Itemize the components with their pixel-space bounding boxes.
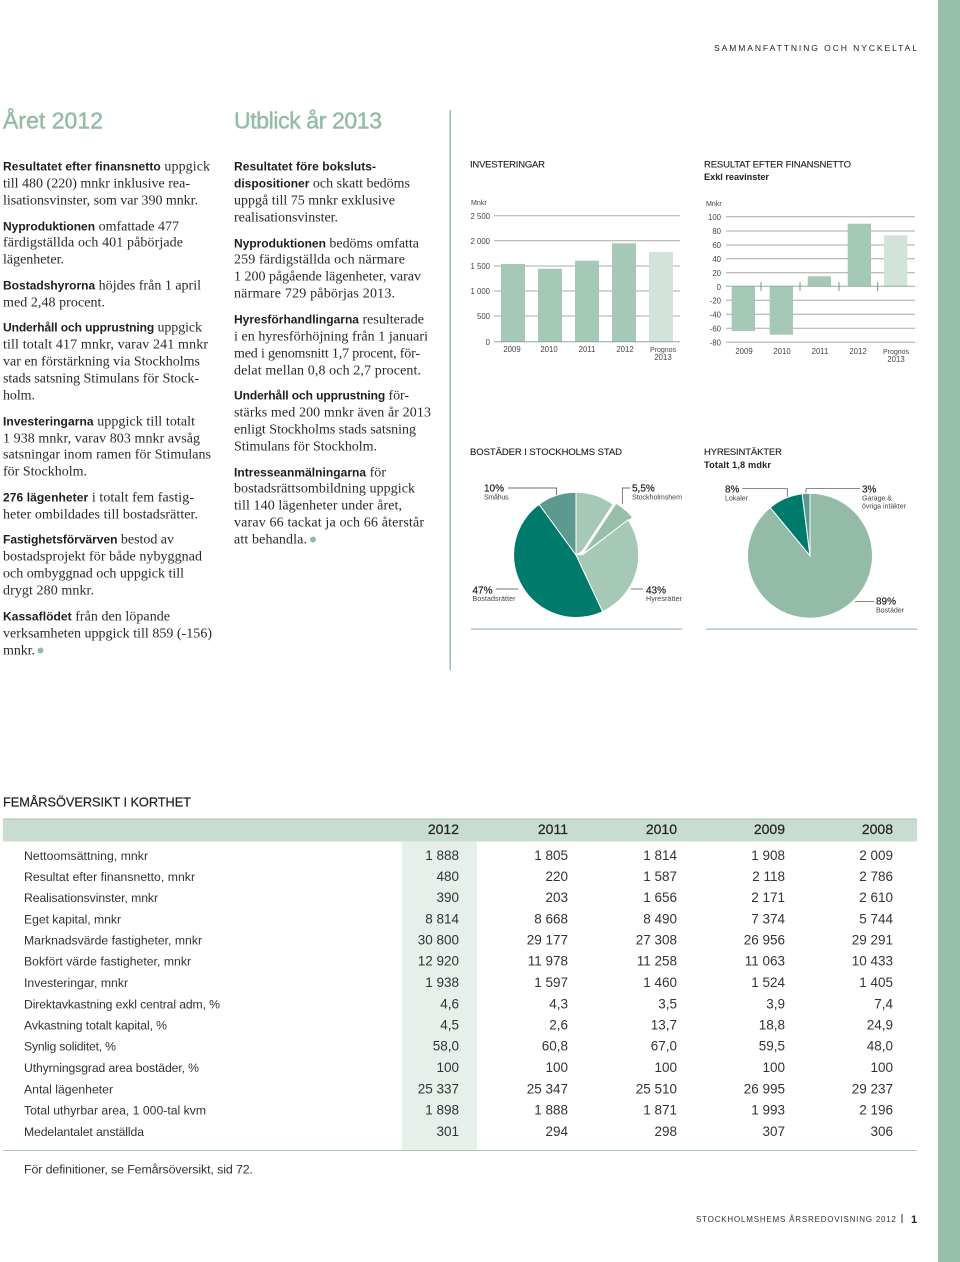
bar chart: Resultat efter finansnetto: -20 bbox=[710, 296, 722, 306]
column 2011: 2,6 bbox=[549, 1018, 568, 1032]
column 2010: 67,0 bbox=[651, 1038, 677, 1054]
pie chart: Bostäder i Stockholms stad: 5,5% bbox=[632, 484, 655, 494]
text block: Utblick år 2013: Stimulans för Stockholm. bbox=[234, 440, 377, 454]
text block: Utblick år 2013: dispositioner och skatt bedöms bbox=[234, 176, 410, 192]
text block: Utblick år 2013: stärks med 200 mnkr även år 2013 bbox=[234, 406, 431, 420]
text block: Året 2012: till totalt 417 mnkr, varav 241 mnkr bbox=[3, 338, 208, 352]
pie chart: Bostäder i Stockholms stad: Stockholmshem bbox=[632, 494, 682, 502]
column 2012: 1 898 bbox=[425, 1102, 459, 1118]
bar chart: Investeringar: Mnkr bbox=[471, 199, 487, 207]
bar chart: Investeringar bbox=[470, 160, 680, 362]
text block: Året 2012: mnkr. bbox=[3, 644, 35, 658]
column 2012: 58,0 bbox=[433, 1038, 459, 1054]
pie chart: Bostäder i Stockholms stad: Hyresrätter bbox=[646, 595, 683, 603]
column 2010: 1 460 bbox=[643, 975, 677, 990]
bar chart: Resultat efter finansnetto: Prognos bbox=[883, 349, 910, 356]
column 2011: 8 668 bbox=[534, 912, 568, 926]
table header years bbox=[428, 821, 893, 837]
text block: Utblick år 2013: Intresseanmälningarna för bbox=[234, 466, 386, 480]
bar chart: Resultat efter finansnetto: 80 bbox=[712, 227, 722, 236]
column 2009: 1 524 bbox=[751, 975, 785, 990]
column 2010: 1 871 bbox=[643, 1102, 677, 1118]
row labels: Resultat efter finansnetto, mnkr bbox=[24, 870, 195, 884]
bar chart: Resultat efter finansnetto: 40 bbox=[712, 255, 722, 264]
column 2012: 25 337 bbox=[418, 1082, 459, 1096]
column 2008: 29 291 bbox=[852, 932, 893, 948]
table header years: 2010 bbox=[646, 821, 677, 837]
column 2008: 2 196 bbox=[859, 1102, 893, 1118]
pie chart: Hyresintäkter bbox=[704, 447, 917, 630]
pie chart: Bostäder i Stockholms stad: BOSTÄDER I STOCKHOLMS STAD bbox=[470, 447, 622, 458]
column 2010: 11 258 bbox=[637, 954, 677, 968]
text block: Utblick år 2013: Underhåll och upprustning för- bbox=[234, 388, 409, 404]
column 2012: 100 bbox=[436, 1060, 459, 1075]
bar chart: Investeringar: 0 bbox=[486, 338, 491, 347]
bar chart: Investeringar: 2011 bbox=[579, 345, 595, 354]
column 2008: 10 433 bbox=[852, 954, 893, 968]
column 2009: 26 995 bbox=[744, 1082, 785, 1096]
bar chart: Investeringar: 2013 bbox=[654, 353, 672, 362]
text block: Året 2012: och ombyggnad och uppgick till bbox=[3, 566, 184, 582]
text block: Utblick år 2013: att behandla. bbox=[234, 532, 307, 548]
table header years: 2012 bbox=[428, 821, 459, 837]
vertical divider bbox=[450, 110, 451, 670]
row labels: Antal lägenheter bbox=[24, 1082, 113, 1096]
text block: Året 2012: Underhåll och upprustning uppgick bbox=[3, 320, 202, 336]
pie chart: Hyresintäkter: 8% bbox=[725, 484, 740, 496]
text block: Utblick år 2013 bbox=[234, 160, 431, 548]
text block: Året 2012: 1 938 mnkr, varav 803 mnkr avsåg bbox=[3, 432, 200, 446]
column 2008 bbox=[852, 848, 893, 1139]
pie chart: Hyresintäkter: HYRESINTÄKTER bbox=[704, 447, 782, 458]
bar chart: Investeringar: 1 000 bbox=[470, 287, 491, 296]
pie chart: Bostäder i Stockholms stad bbox=[470, 447, 683, 630]
pie chart: Bostäder i Stockholms stad: 10% bbox=[484, 484, 504, 494]
column 2011: 220 bbox=[545, 869, 568, 884]
bar chart: Resultat efter finansnetto: RESULTAT EFTER FINANSNETTO bbox=[704, 160, 851, 170]
column 2009: 3,9 bbox=[766, 996, 785, 1012]
column 2011: 1 805 bbox=[534, 848, 568, 863]
bar chart: Investeringar: 500 bbox=[477, 312, 491, 321]
column 2012: 4,5 bbox=[440, 1018, 459, 1032]
row labels: Nettoomsättning, mnkr bbox=[24, 849, 148, 863]
column 2011: 1 597 bbox=[534, 975, 568, 990]
column 2012: 390 bbox=[436, 890, 459, 905]
column 2011: 203 bbox=[545, 890, 568, 905]
text block: Utblick år 2013: närmare 729 påbörjas 2013. bbox=[234, 286, 395, 302]
row labels: Uthyrningsgrad area bostäder, % bbox=[24, 1061, 199, 1075]
column 2012: 1 888 bbox=[425, 848, 459, 863]
table: five-year overview bbox=[3, 818, 917, 1151]
column 2010: 3,5 bbox=[658, 996, 677, 1012]
text block: Utblick år 2013: 1 200 pågående lägenheter, varav bbox=[234, 270, 421, 284]
row labels: Total uthyrbar area, 1 000-tal kvm bbox=[24, 1104, 206, 1118]
text block: Året 2012: lägenheter. bbox=[3, 252, 64, 268]
text block: Utblick år 2013: enligt Stockholms stads satsning bbox=[234, 422, 416, 438]
column 2009: 11 063 bbox=[745, 954, 785, 968]
column 2008: 2 786 bbox=[859, 869, 893, 884]
text block: Året 2012: färdigställda och 401 påbörjade bbox=[3, 236, 183, 250]
bar chart: Resultat efter finansnetto: -80 bbox=[710, 338, 722, 348]
column 2010: 298 bbox=[654, 1124, 677, 1139]
column 2012: 301 bbox=[436, 1124, 459, 1139]
column 2010: 1 656 bbox=[643, 890, 677, 905]
pie chart: Hyresintäkter: Bostäder bbox=[876, 606, 905, 614]
page footer: STOCKHOLMSHEMS ÅRSREDOVISNING 2012 bbox=[696, 1215, 897, 1224]
pie chart: Bostäder i Stockholms stad: Småhus bbox=[484, 494, 509, 502]
pie chart: Hyresintäkter: Garage & bbox=[862, 494, 892, 502]
text block: Året 2012: Kassaflödet från den löpande bbox=[3, 610, 170, 624]
bar chart: Investeringar: Prognos bbox=[650, 347, 677, 354]
bar chart: Resultat efter finansnetto: 2010 bbox=[773, 347, 791, 356]
page footer bbox=[696, 1214, 917, 1226]
text block: Året 2012: Investeringarna uppgick till totalt bbox=[3, 414, 195, 430]
pie chart: Bostäder i Stockholms stad: Bostadsrätter bbox=[472, 595, 516, 603]
column 2009: 1 908 bbox=[751, 848, 785, 863]
text block: Utblick år 2013: med i genomsnitt 1,7 procent, för- bbox=[234, 346, 420, 362]
text block: Året 2012: för Stockholm. bbox=[3, 464, 87, 480]
text block: Året 2012: bostadsprojekt för både nybyggnad bbox=[3, 550, 202, 564]
column 2010: 8 490 bbox=[643, 912, 677, 926]
text block: Året 2012: var en förstärkning via Stockholms bbox=[3, 354, 200, 370]
bar chart: Resultat efter finansnetto: 100 bbox=[708, 213, 722, 222]
column 2008: 306 bbox=[870, 1124, 893, 1139]
column 2010: 13,7 bbox=[651, 1018, 677, 1032]
pie chart: Hyresintäkter: övriga intäkter bbox=[862, 502, 907, 510]
column 2010 bbox=[636, 848, 677, 1139]
text block: Utblick år 2013: uppgå till 75 mnkr exklusive bbox=[234, 194, 395, 208]
pie chart: Hyresintäkter: Totalt 1,8 mdkr bbox=[704, 460, 771, 470]
column 2009: 26 956 bbox=[744, 932, 785, 948]
bar chart: Investeringar: 2 000 bbox=[470, 237, 491, 246]
text block: Utblick år 2013: varav 66 tackat ja och 66 återstår bbox=[234, 516, 424, 530]
text block: Utblick år 2013: bostadsrättsombildning uppgick bbox=[234, 482, 415, 496]
column 2011: 11 978 bbox=[528, 954, 568, 968]
bar chart: Resultat efter finansnetto: 2013 bbox=[887, 355, 905, 364]
column 2012: 1 938 bbox=[425, 975, 459, 990]
column 2009: 1 993 bbox=[751, 1102, 785, 1118]
bar chart: Resultat efter finansnetto: Exkl reavinster bbox=[704, 172, 769, 182]
page footer: 1 bbox=[911, 1214, 917, 1226]
bar chart: Investeringar: 2009 bbox=[503, 345, 521, 354]
row labels: Medelantalet anställda bbox=[24, 1125, 144, 1139]
bar chart: Investeringar: 2010 bbox=[540, 345, 558, 354]
text block: Året 2012: verksamheten uppgick till 859 (-156) bbox=[3, 626, 212, 642]
column 2009: 2 118 bbox=[752, 869, 785, 884]
bar chart: Resultat efter finansnetto bbox=[704, 160, 915, 364]
row labels: Eget kapital, mnkr bbox=[24, 912, 121, 926]
column 2011: 1 888 bbox=[534, 1102, 568, 1118]
text block: Året 2012: till 480 (220) mnkr inklusive rea- bbox=[3, 176, 190, 192]
table header years: 2008 bbox=[862, 821, 893, 837]
text block: Året 2012: drygt 280 mnkr. bbox=[3, 584, 94, 598]
bar chart: Resultat efter finansnetto: Mnkr bbox=[706, 200, 722, 208]
column 2011: 4,3 bbox=[549, 996, 568, 1012]
heading: Året 2012: Året 2012 bbox=[3, 106, 103, 134]
column 2008: 100 bbox=[870, 1060, 893, 1075]
column 2011: 25 347 bbox=[527, 1082, 568, 1096]
text block: Utblick år 2013: till 140 lägenheter under året, bbox=[234, 498, 402, 514]
table header years: 2011 bbox=[538, 821, 568, 837]
column 2010: 1 587 bbox=[643, 869, 677, 884]
row labels: Investeringar, mnkr bbox=[24, 976, 128, 990]
text block: Året 2012: Bostadshyrorna höjdes från 1 april bbox=[3, 278, 201, 294]
column 2010: 27 308 bbox=[636, 932, 677, 948]
column 2011: 60,8 bbox=[542, 1038, 568, 1054]
column 2012 bbox=[418, 848, 459, 1139]
table footnote: För definitioner, se Femårsöversikt, sid 72. bbox=[24, 1162, 253, 1176]
column 2011: 29 177 bbox=[527, 932, 568, 948]
column 2008: 29 237 bbox=[852, 1082, 893, 1096]
row labels: Synlig soliditet, % bbox=[24, 1040, 116, 1054]
text block: Utblick år 2013: i en hyresförhöjning från 1 januari bbox=[234, 330, 428, 344]
row labels: Avkastning totalt kapital, % bbox=[24, 1018, 167, 1032]
bar chart: Resultat efter finansnetto: 20 bbox=[712, 269, 722, 278]
page header: SAMMANFATTNING OCH NYCKELTAL bbox=[714, 43, 917, 53]
row labels: Bokfört värde fastigheter, mnkr bbox=[24, 954, 191, 968]
row labels: Direktavkastning exkl central adm, % bbox=[24, 998, 220, 1012]
text block: Utblick år 2013: realisationsvinster. bbox=[234, 210, 338, 226]
column 2009: 2 171 bbox=[751, 890, 785, 905]
text block: Utblick år 2013: Nyproduktionen bedöms omfatta bbox=[234, 236, 420, 252]
text block: Utblick år 2013: 259 färdigställda och närmare bbox=[234, 252, 405, 268]
bar chart: Resultat efter finansnetto: 2011 bbox=[812, 347, 828, 356]
table header years: 2009 bbox=[754, 821, 785, 837]
text block: Utblick år 2013: Hyresförhandlingarna resulterade bbox=[234, 312, 424, 328]
column 2012: 8 814 bbox=[425, 912, 459, 926]
row labels: Realisationsvinster, mnkr bbox=[24, 891, 158, 905]
bar chart: Resultat efter finansnetto: 60 bbox=[712, 241, 722, 250]
text block: Året 2012: Resultatet efter finansnetto uppgick bbox=[3, 160, 210, 174]
text block: Året 2012: satsningar inom ramen för Stimulans bbox=[3, 448, 211, 462]
column 2011 bbox=[527, 848, 568, 1139]
text block: Året 2012: stads satsning Stimulans för Stock- bbox=[3, 372, 199, 386]
column 2011: 100 bbox=[545, 1060, 568, 1075]
bar chart: Resultat efter finansnetto: 2012 bbox=[849, 347, 867, 356]
bar chart: Investeringar: 2012 bbox=[616, 345, 634, 354]
pie chart: Hyresintäkter: 89% bbox=[876, 596, 896, 608]
column 2010: 25 510 bbox=[636, 1082, 677, 1096]
text block: Året 2012: med 2,48 procent. bbox=[3, 296, 105, 310]
bar chart: Investeringar: INVESTERINGAR bbox=[470, 160, 545, 170]
column 2011: 294 bbox=[545, 1124, 568, 1139]
right sidebar band bbox=[938, 0, 960, 1262]
text block: Året 2012: 276 lägenheter i totalt fem fastig- bbox=[3, 490, 194, 506]
bar chart: Investeringar: 1 500 bbox=[470, 262, 491, 271]
column 2009 bbox=[744, 848, 785, 1139]
column 2009: 100 bbox=[762, 1060, 785, 1075]
row labels bbox=[24, 849, 220, 1139]
row labels: Marknadsvärde fastigheter, mnkr bbox=[24, 934, 202, 948]
text block: Året 2012: Fastighetsförvärven bestod av bbox=[3, 532, 174, 548]
column 2009: 18,8 bbox=[759, 1018, 785, 1032]
pie chart: Hyresintäkter: 3% bbox=[862, 484, 877, 496]
text block: Året 2012: holm. bbox=[3, 388, 35, 404]
text block: Utblick år 2013: delat mellan 0,8 och 2,7 procent. bbox=[234, 364, 421, 378]
column 2008: 5 744 bbox=[859, 912, 893, 926]
column 2008: 7,4 bbox=[874, 996, 893, 1012]
column 2008: 2 610 bbox=[859, 890, 893, 905]
column 2010: 1 814 bbox=[643, 848, 677, 863]
bar chart: Investeringar: 2 500 bbox=[470, 212, 491, 221]
column 2010: 100 bbox=[654, 1060, 677, 1075]
column 2009: 59,5 bbox=[759, 1038, 785, 1054]
bar chart: Resultat efter finansnetto: -40 bbox=[710, 310, 722, 320]
column 2009: 307 bbox=[762, 1124, 785, 1139]
heading: Utblick år 2013: Utblick år 2013 bbox=[234, 108, 382, 134]
column 2012: 12 920 bbox=[418, 954, 459, 968]
column 2008: 1 405 bbox=[859, 975, 893, 990]
column 2008: 48,0 bbox=[867, 1038, 893, 1054]
column 2012: 4,6 bbox=[440, 996, 459, 1012]
column 2008: 2 009 bbox=[859, 848, 893, 863]
text block: Året 2012: heter ombildades till bostadsrätter. bbox=[3, 508, 198, 522]
bar chart: Resultat efter finansnetto: -60 bbox=[710, 324, 722, 334]
column 2008: 24,9 bbox=[867, 1018, 893, 1032]
text block: Året 2012: lisationsvinster, som var 390 mnkr. bbox=[3, 194, 198, 208]
bar chart: Resultat efter finansnetto: 0 bbox=[717, 283, 722, 292]
pie chart: Bostäder i Stockholms stad: 43% bbox=[646, 586, 666, 596]
text block: Utblick år 2013: Resultatet före boksluts- bbox=[234, 160, 376, 174]
column 2012: 480 bbox=[436, 869, 459, 884]
column 2012: 30 800 bbox=[418, 932, 459, 948]
text block: Året 2012 bbox=[3, 160, 212, 658]
column 2009: 7 374 bbox=[751, 912, 785, 926]
pie chart: Bostäder i Stockholms stad: 47% bbox=[472, 586, 493, 596]
bar chart: Resultat efter finansnetto: 2009 bbox=[735, 347, 753, 356]
pie chart: Hyresintäkter: Lokaler bbox=[725, 494, 749, 502]
heading: Femårsöversikt i korthet: FEMÅRSÖVERSIKT I KORTHET bbox=[3, 794, 191, 810]
text block: Året 2012: Nyproduktionen omfattade 477 bbox=[3, 220, 179, 234]
